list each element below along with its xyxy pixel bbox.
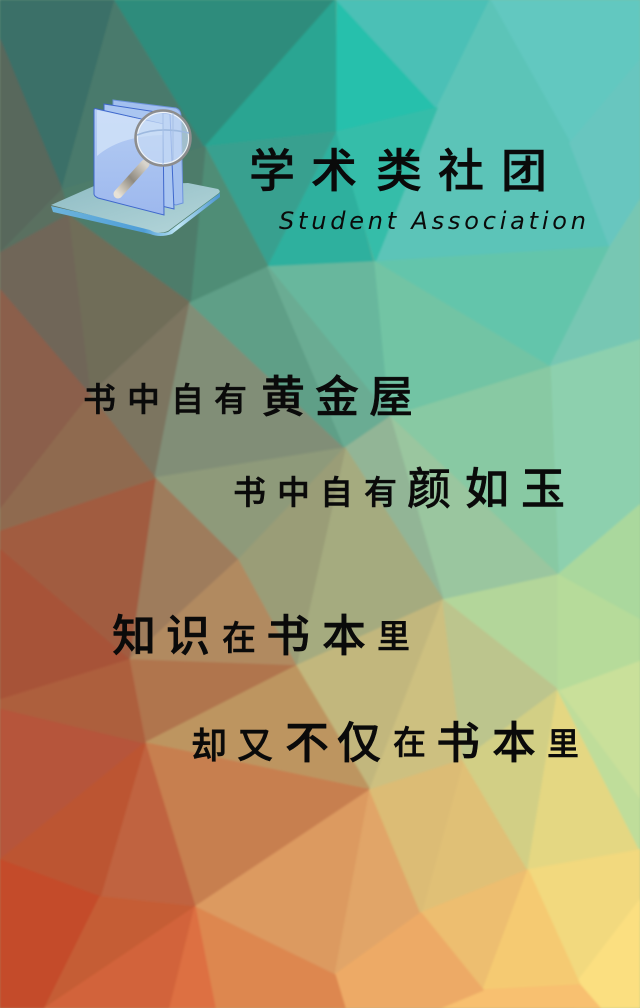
title: 学术类社团: 学术类社团 — [249, 145, 547, 197]
subtitle: Student Association: Student Association — [279, 207, 586, 235]
text line: 知识在书本里: 书本 — [266, 612, 366, 661]
text line: 却又不仅在书本里: 不仅 — [285, 719, 381, 768]
text line: 却又不仅在书本里: 里 — [547, 726, 579, 762]
text line: 书中自有颜如玉: 颜如玉 — [407, 465, 565, 514]
text line: 知识在书本里: 知识 — [112, 612, 210, 661]
text line: 却又不仅在书本里: 书本 — [436, 719, 536, 768]
icon: stack of books — [94, 100, 183, 215]
text line: 知识在书本里: 在 — [222, 620, 256, 658]
text line: 书中自有黄金屋: 黄金屋 — [261, 373, 413, 422]
text line: 却又不仅在书本里: 却又 — [191, 725, 273, 766]
icon: magnifying glass — [118, 110, 190, 194]
text line: 却又不仅在书本里: 在 — [393, 724, 426, 761]
icon: tray — [51, 183, 220, 236]
text line: 书中自有黄金屋: 书中自有 — [83, 381, 247, 418]
text line: 书中自有颜如玉: 书中自有 — [233, 474, 397, 511]
icon: books under magnifying glass on a glass tray — [51, 100, 220, 236]
text line: 知识在书本里: 里 — [377, 618, 410, 655]
